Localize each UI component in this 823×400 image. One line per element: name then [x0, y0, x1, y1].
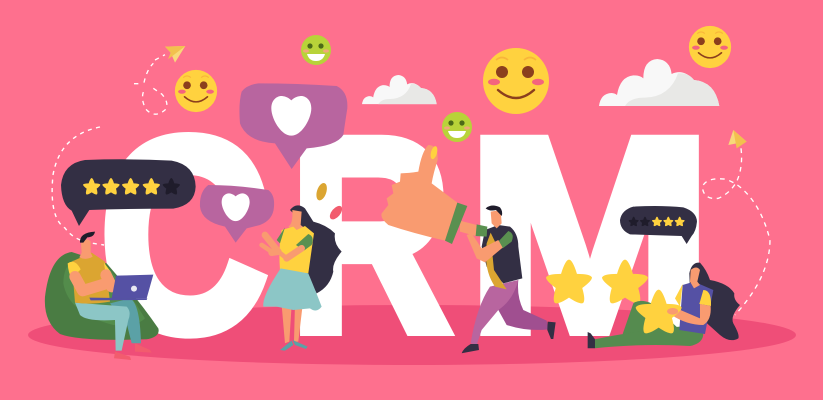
skirt: [263, 268, 322, 310]
hair: [290, 205, 342, 293]
CRM letters: R: [290, 82, 451, 389]
smiley: green right: [442, 112, 472, 142]
smiley: top right yellow: [689, 26, 731, 68]
hand: [381, 145, 457, 241]
nail: [429, 145, 439, 160]
arms: [75, 275, 112, 291]
arm: [668, 304, 711, 325]
seated woman with star and bubble: [546, 206, 740, 348]
rating bubble: [620, 206, 697, 244]
dark leg: [110, 298, 141, 343]
torso: [72, 253, 110, 304]
decorative blobs: [314, 182, 344, 222]
tie: [486, 233, 507, 289]
orange mark: [314, 182, 329, 202]
ground ellipse: [28, 305, 796, 365]
cuff: [445, 203, 467, 244]
held star: [636, 290, 682, 333]
CRM letters: [100, 82, 712, 389]
large heart speech bubble: [239, 83, 347, 169]
laptop: [112, 275, 153, 298]
face: [690, 267, 700, 288]
CRM letters: C: [100, 82, 268, 388]
shoes: [462, 322, 556, 353]
legs: [623, 301, 680, 334]
shirt: [279, 226, 314, 273]
face: [288, 210, 305, 232]
thumbs up megaphone man: [381, 145, 556, 353]
woman in skirt: [262, 205, 342, 351]
shoes: [280, 340, 308, 351]
smiley: large yellow: [483, 48, 549, 114]
arms: [265, 235, 302, 258]
smiley: left yellow: [175, 70, 217, 112]
light leg: [75, 303, 130, 351]
head and hair: [79, 240, 93, 259]
man on beanbag with review bubble: [45, 159, 196, 360]
hand: [667, 308, 678, 315]
head: [491, 210, 502, 228]
free star right: [602, 260, 648, 303]
front leg: [471, 280, 518, 345]
back leg: [498, 280, 548, 330]
rating bubble: [61, 159, 196, 226]
sleeve: [475, 224, 513, 248]
cloud: large: [599, 59, 719, 106]
dashed flight path left: [52, 127, 104, 245]
torso: [482, 225, 522, 283]
beanbag: [45, 252, 159, 340]
free star left: [546, 260, 592, 303]
smiley: green top: [301, 35, 331, 65]
legs: [282, 305, 303, 343]
paper plane and trail right: [702, 130, 770, 315]
paper plane and trail top left: [134, 46, 185, 114]
CRM letters: M: [467, 82, 712, 389]
torso: [679, 282, 713, 334]
arm: [460, 221, 503, 262]
red mark: [328, 204, 344, 222]
small heart speech bubble: [200, 185, 274, 243]
cloud: small: [362, 75, 437, 104]
hair: [689, 263, 740, 340]
